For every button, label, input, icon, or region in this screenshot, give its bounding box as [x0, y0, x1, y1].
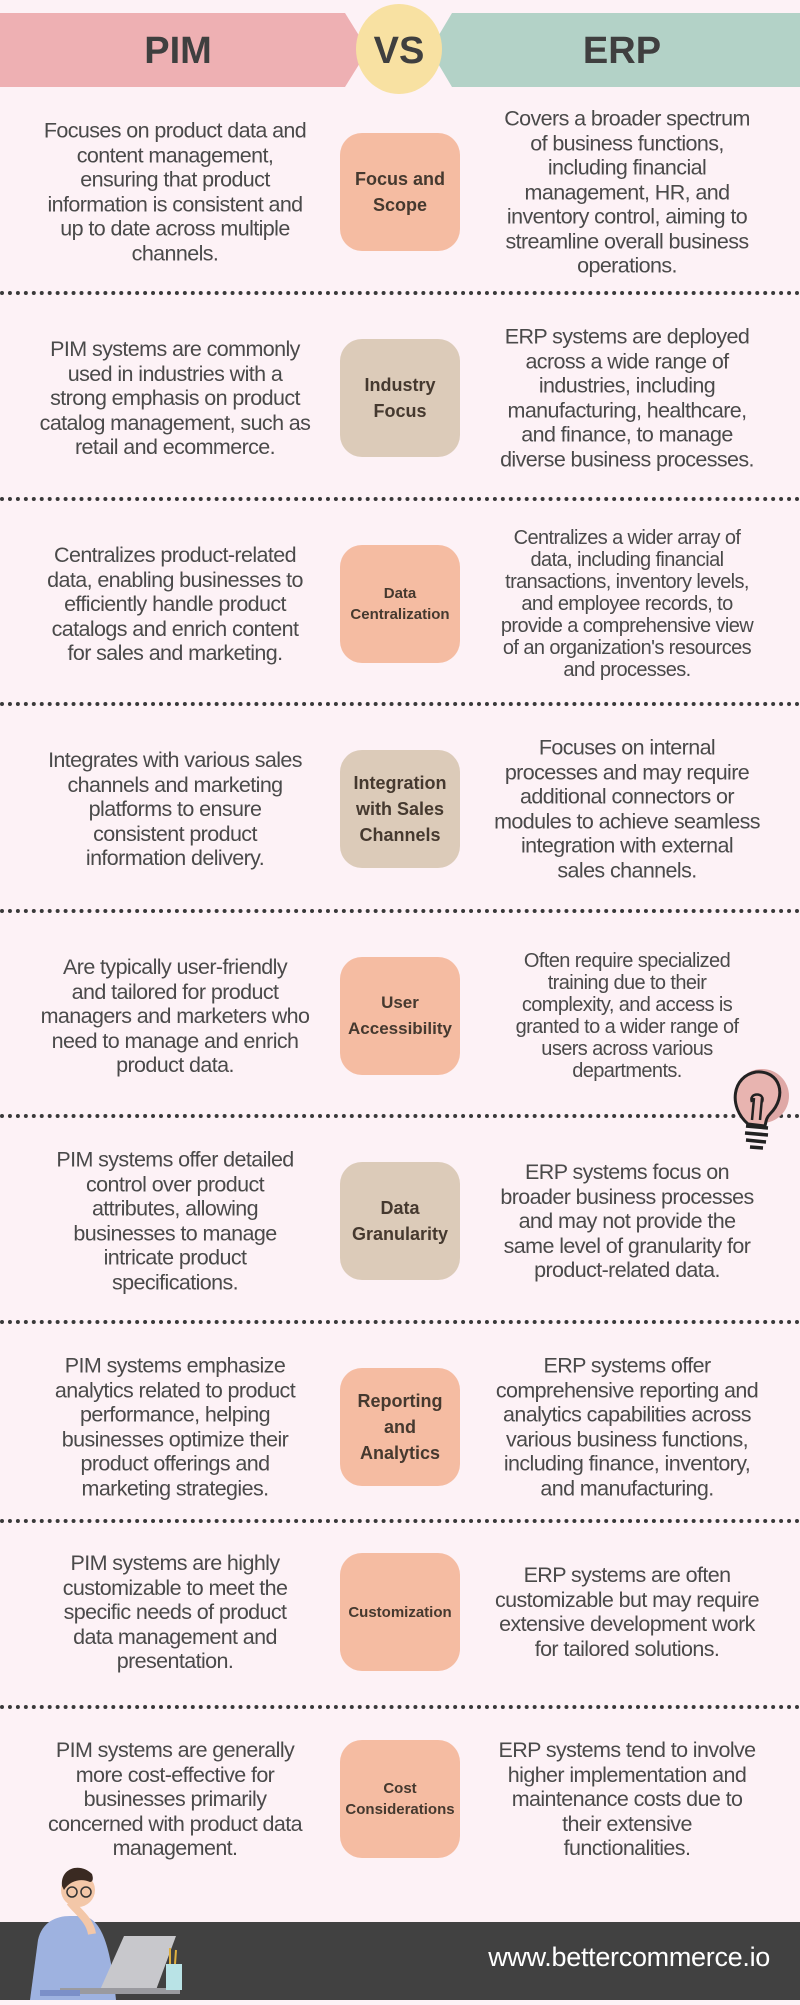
row: Data Granularity: businesses to manage: [73, 1221, 277, 1245]
row: Integration with Sales Channels: with Sales: [356, 799, 444, 819]
row: Focus and Scope: [44, 106, 750, 277]
header band: PIM: [0, 13, 368, 87]
row: Industry Focus: across a wide range of: [525, 349, 729, 373]
row: Reporting and Analytics: and: [384, 1417, 416, 1437]
row: Data Centralization: of an organization's resources: [503, 637, 751, 659]
row: Focus and Scope: of business functions,: [530, 131, 724, 155]
row: Cost Considerations: maintenance costs due to: [512, 1787, 742, 1811]
text: and processes.: [563, 659, 691, 681]
row: Data Granularity: ERP systems focus on: [525, 1160, 729, 1184]
row: Data Centralization: efficiently handle product: [64, 592, 286, 616]
row: Cost Considerations: higher implementation and: [508, 1762, 746, 1786]
row: User Accessibility: Are typically user-friendly: [63, 955, 287, 979]
text: ERP systems offer: [543, 1354, 711, 1378]
row: Customization: customizable to meet the: [63, 1575, 287, 1599]
row: Focus and Scope: Focus and: [355, 169, 445, 189]
header band: ERP: ERP: [583, 30, 661, 72]
row: Data Granularity: control over product: [86, 1172, 264, 1196]
row: User Accessibility: and tailored for product: [72, 979, 278, 1003]
row: Data Centralization: [47, 527, 754, 681]
text: Covers a broader spectrum: [504, 106, 750, 130]
row: Reporting and Analytics: product offerings and: [80, 1452, 270, 1476]
row: Customization: specific needs of product: [64, 1600, 286, 1624]
row: User Accessibility: need to manage and enrich: [52, 1028, 298, 1052]
text: channels.: [132, 241, 218, 265]
row: Integration with Sales Channels: information delivery.: [86, 846, 264, 870]
row: User Accessibility: [41, 950, 740, 1082]
text: PIM systems emphasize: [65, 1354, 285, 1378]
row: User Accessibility: departments.: [572, 1060, 682, 1082]
row: Integration with Sales Channels: processes and may require: [505, 760, 749, 784]
row: Data Centralization: data, enabling businesses to: [47, 567, 303, 591]
row: Customization: ERP systems are often: [524, 1563, 730, 1587]
row: Customization: presentation.: [117, 1649, 233, 1673]
row: Industry Focus: industries, including: [539, 374, 715, 398]
illustration: person at laptop: [30, 1868, 182, 2000]
row: Customization: Customization: [348, 1604, 452, 1620]
row: Reporting and Analytics: including finance, inventory,: [504, 1452, 750, 1476]
row: Focus and Scope: streamline overall business: [505, 229, 749, 253]
row: Cost Considerations: ERP systems tend to involve: [498, 1738, 756, 1762]
row: Integration with Sales Channels: additional connectors or: [520, 784, 734, 808]
row: Focus and Scope: Scope: [373, 195, 427, 215]
row: User Accessibility: training due to their: [548, 972, 706, 994]
VS circle: [356, 4, 442, 94]
row: Reporting and Analytics: comprehensive reporting and: [496, 1378, 758, 1402]
row: Industry Focus: retail and ecommerce.: [75, 435, 275, 459]
row: Reporting and Analytics: [55, 1354, 758, 1500]
header band: ERP: [430, 13, 800, 87]
row: Industry Focus: manufacturing, healthcare,: [508, 398, 746, 422]
text: operations.: [577, 253, 677, 277]
row: Data Centralization: transactions, inventory levels,: [505, 571, 749, 593]
row: Reporting and Analytics: analytics capabilities across: [503, 1402, 751, 1426]
text: specifications.: [112, 1270, 238, 1294]
VS circle: VS: [374, 30, 424, 72]
row: Industry Focus: and finance, to manage: [521, 422, 733, 446]
row: User Accessibility: Often require specialized: [524, 950, 730, 972]
row: User Accessibility: User: [381, 993, 419, 1012]
row: Cost Considerations: PIM systems are generally: [56, 1738, 294, 1762]
row: Data Granularity: product-related data.: [534, 1258, 720, 1282]
text: ERP systems are deployed: [505, 324, 749, 348]
row: Data Granularity: attributes, allowing: [92, 1196, 258, 1220]
row: Customization: for tailored solutions.: [535, 1636, 719, 1660]
row: Integration with Sales Channels: Channels: [359, 825, 441, 845]
row: Integration with Sales Channels: consistent product: [93, 821, 257, 845]
row: Reporting and Analytics: performance, helping: [80, 1402, 270, 1426]
row: Data Centralization: data, including financial: [531, 549, 723, 571]
header band: PIM: PIM: [144, 30, 212, 72]
row: Industry Focus: [40, 324, 754, 471]
row: Reporting and Analytics: Reporting: [358, 1391, 442, 1411]
row: Customization: extensive development work: [499, 1612, 755, 1636]
row: Cost Considerations: concerned with product data: [48, 1811, 302, 1835]
row: Data Centralization: provide a comprehensive view: [501, 615, 753, 637]
row: User Accessibility: complexity, and access is: [522, 994, 732, 1016]
row: Cost Considerations: businesses primarily: [84, 1787, 266, 1811]
row: Reporting and Analytics: Analytics: [360, 1443, 440, 1463]
row: Industry Focus: catalog management, such as: [40, 410, 310, 434]
row: Cost Considerations: more cost-effective for: [76, 1762, 274, 1786]
row: Integration with Sales Channels: channels and marketing: [67, 772, 283, 796]
website url: www.bettercommerce.io: [488, 1942, 770, 1972]
row: Customization: [63, 1551, 759, 1673]
row: User Accessibility: Accessibility: [348, 1019, 452, 1038]
row: Data Granularity: same level of granularity for: [504, 1233, 750, 1257]
text: Focuses on internal: [539, 736, 715, 760]
row: Cost Considerations: their extensive: [562, 1811, 692, 1835]
row: Data Centralization: Centralization: [350, 606, 450, 623]
row: Industry Focus: PIM systems are commonly: [50, 337, 300, 361]
row: User Accessibility: product data.: [116, 1053, 234, 1077]
row: Focus and Scope: information is consistent and: [47, 192, 303, 216]
icon: light bulb: [734, 1069, 789, 1150]
row: Reporting and Analytics: analytics related to product: [55, 1378, 295, 1402]
header: [0, 4, 800, 94]
row: Data Granularity: [56, 1148, 754, 1294]
text: and manufacturing.: [540, 1476, 714, 1500]
row: Data Granularity: intricate product: [104, 1246, 246, 1270]
row: User Accessibility: granted to a wider range of: [516, 1016, 738, 1038]
text: sales channels.: [557, 858, 697, 882]
row: Industry Focus: Focus: [373, 401, 426, 421]
row: Integration with Sales Channels: Integrates with various sales: [48, 748, 302, 772]
row: Data Granularity: broader business processes: [500, 1184, 754, 1208]
row: Focus and Scope: management, HR, and: [525, 180, 729, 204]
row: Cost Considerations: [48, 1738, 756, 1860]
row: Data Centralization: Centralizes product-related: [54, 543, 296, 567]
row: Cost Considerations: functionalities.: [564, 1836, 690, 1860]
row: User Accessibility: managers and marketers who: [41, 1004, 309, 1028]
row: Data Centralization: Data: [384, 585, 416, 602]
row: Data Centralization: catalogs and enrich content: [52, 616, 298, 640]
row: Customization: PIM systems are highly: [70, 1551, 280, 1575]
row: Customization: customizable but may require: [495, 1588, 759, 1612]
row: Customization: data management and: [73, 1624, 277, 1648]
row: Data Centralization: for sales and marketing.: [67, 641, 283, 665]
row: Integration with Sales Channels: [48, 736, 760, 882]
row: Integration with Sales Channels: integration with external: [521, 834, 733, 858]
row: Cost Considerations: management.: [113, 1836, 237, 1860]
row: Cost Considerations: Cost: [383, 1780, 417, 1797]
row: User Accessibility: users across various: [541, 1038, 713, 1060]
row: Focus and Scope: ensuring that product: [80, 168, 270, 192]
row: Cost Considerations: Considerations: [345, 1801, 455, 1818]
row: Reporting and Analytics: various business functions,: [506, 1427, 748, 1451]
row: Industry Focus: used in industries with a: [68, 361, 282, 385]
row: Data Centralization: and employee records, to: [521, 593, 733, 615]
footer: [0, 1922, 800, 2000]
row: Data Granularity: Granularity: [352, 1224, 448, 1244]
row: Integration with Sales Channels: platforms to ensure: [89, 797, 261, 821]
text: PIM systems offer detailed: [56, 1148, 294, 1172]
row: Data Granularity: Data: [380, 1198, 420, 1218]
row: Industry Focus: Industry: [364, 375, 436, 395]
row: Integration with Sales Channels: Integration: [354, 773, 446, 793]
row: Focus and Scope: content management,: [77, 143, 273, 167]
row: Integration with Sales Channels: modules to achieve seamless: [494, 809, 760, 833]
text: Focuses on product data and: [44, 118, 306, 142]
row: Reporting and Analytics: businesses optimize their: [62, 1427, 288, 1451]
row: Focus and Scope: up to date across multiple: [60, 216, 290, 240]
row: Focus and Scope: inventory control, aiming to: [507, 204, 747, 228]
row: Industry Focus: strong emphasis on product: [50, 386, 300, 410]
text: diverse business processes.: [500, 447, 754, 471]
text: Centralizes a wider array of: [514, 527, 740, 549]
row: Focus and Scope: including financial: [548, 155, 706, 179]
row: Data Granularity: and may not provide the: [519, 1209, 735, 1233]
text: marketing strategies.: [82, 1476, 268, 1500]
